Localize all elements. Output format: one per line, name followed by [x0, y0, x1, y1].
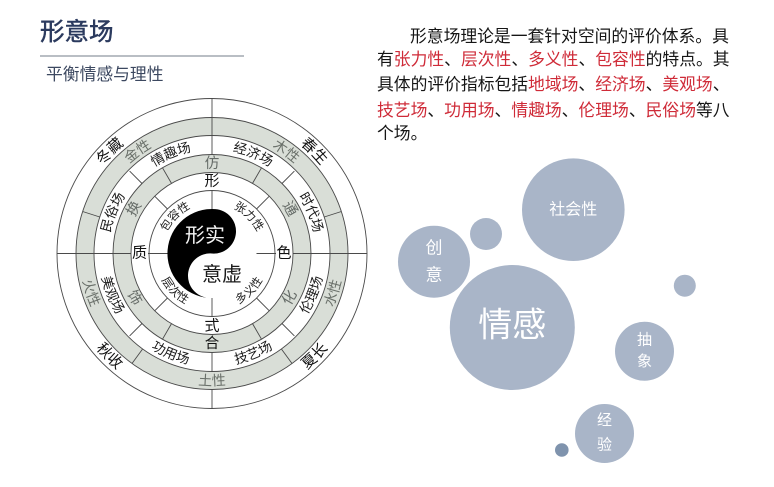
subtitle: 平衡情感与理性: [46, 65, 163, 84]
ring: form labels: 质: [132, 244, 147, 262]
bubble: creativity: 意: [426, 266, 442, 284]
text block: description: [377, 27, 730, 143]
bubble: small right: [674, 275, 696, 297]
ring: five elements: 金性: [125, 140, 152, 164]
ring: five elements: 火性: [82, 280, 101, 307]
ring: six methods: 换: [123, 198, 145, 219]
bubble: abstract: [615, 322, 674, 381]
title: 形意场: [40, 19, 114, 46]
ring: six methods: 合: [205, 335, 220, 352]
ring: eight fields: 情趣场: [150, 142, 190, 167]
ring: six methods: 仿: [205, 155, 219, 172]
ring: eight fields: [100, 141, 324, 365]
text block: description: 有张力性、层次性、多义性、包容性的特点。其: [377, 50, 730, 69]
ring: six methods: 通: [279, 198, 301, 220]
bubble: small upper: [470, 218, 502, 250]
bubble: social: 社会性: [549, 200, 597, 218]
bubble: experience: [575, 404, 634, 463]
ring: seasons: 秋收: [97, 342, 123, 370]
ring: properties: 包容性: [160, 202, 190, 230]
ring: eight fields: 经济场: [233, 141, 273, 166]
ring: form labels: 式: [204, 318, 220, 334]
ring: six methods: 化: [279, 287, 301, 308]
ring: seasons: 冬藏: [97, 136, 124, 162]
yin-yang symbol: 形实: [185, 224, 225, 247]
text block: description: 技艺场、功用场、情趣场、伦理场、民俗场等八: [377, 101, 730, 120]
ring: eight fields: 技艺场: [234, 340, 272, 365]
ring: form labels: [132, 172, 292, 334]
wheel diagram: [56, 98, 368, 409]
divider lines: [57, 98, 367, 408]
ring: eight fields: 美观场: [100, 276, 125, 314]
ring: properties: 张力性: [234, 200, 264, 232]
ring: properties: 多义性: [236, 276, 263, 304]
bubble: creativity: [398, 226, 470, 298]
ring: six methods: [123, 155, 301, 352]
outer rings: [57, 98, 367, 408]
ring: five elements: [82, 140, 342, 387]
ring: form labels: 形: [204, 172, 220, 190]
bubble: experience: 验: [597, 436, 612, 454]
bubble: small dark: [555, 443, 569, 457]
ring: eight fields: 民俗场: [100, 192, 125, 232]
ring: six methods: 饰: [123, 287, 145, 308]
ring: five elements: 水性: [324, 280, 342, 306]
text block: description: 形意场理论是一套针对空间的评价体系。具: [410, 27, 729, 46]
ring: properties: 层次性: [161, 276, 188, 304]
title underline: [40, 55, 244, 56]
ring: five elements: 土性: [198, 373, 226, 387]
ring: eight fields: 时代场: [300, 192, 324, 232]
bubble: creativity: 创: [426, 238, 442, 258]
bubble: experience: 经: [597, 412, 612, 429]
bubble: emotion: [450, 265, 575, 390]
bubble: abstract: 抽: [637, 332, 652, 348]
bubble: social: [522, 158, 625, 261]
ring: properties: [160, 200, 264, 304]
ring: form labels: 色: [276, 244, 292, 262]
ring: seasons: 夏长: [300, 342, 328, 370]
bubble: abstract: 象: [637, 353, 652, 370]
ring: five elements: 木性: [273, 140, 300, 164]
yin-yang symbol: [167, 209, 256, 298]
ring: eight fields: 功用场: [152, 340, 189, 364]
text block: description: 个场。: [377, 124, 427, 143]
text block: description: 具体的评价指标包括地域场、经济场、美观场、: [377, 75, 730, 94]
bubble: emotion: 情感: [478, 307, 546, 345]
yin-yang symbol: 意虚: [202, 263, 242, 286]
ring: eight fields: 伦理场: [299, 276, 323, 314]
ring: seasons: [97, 136, 328, 370]
ring: seasons: 春生: [302, 136, 328, 166]
